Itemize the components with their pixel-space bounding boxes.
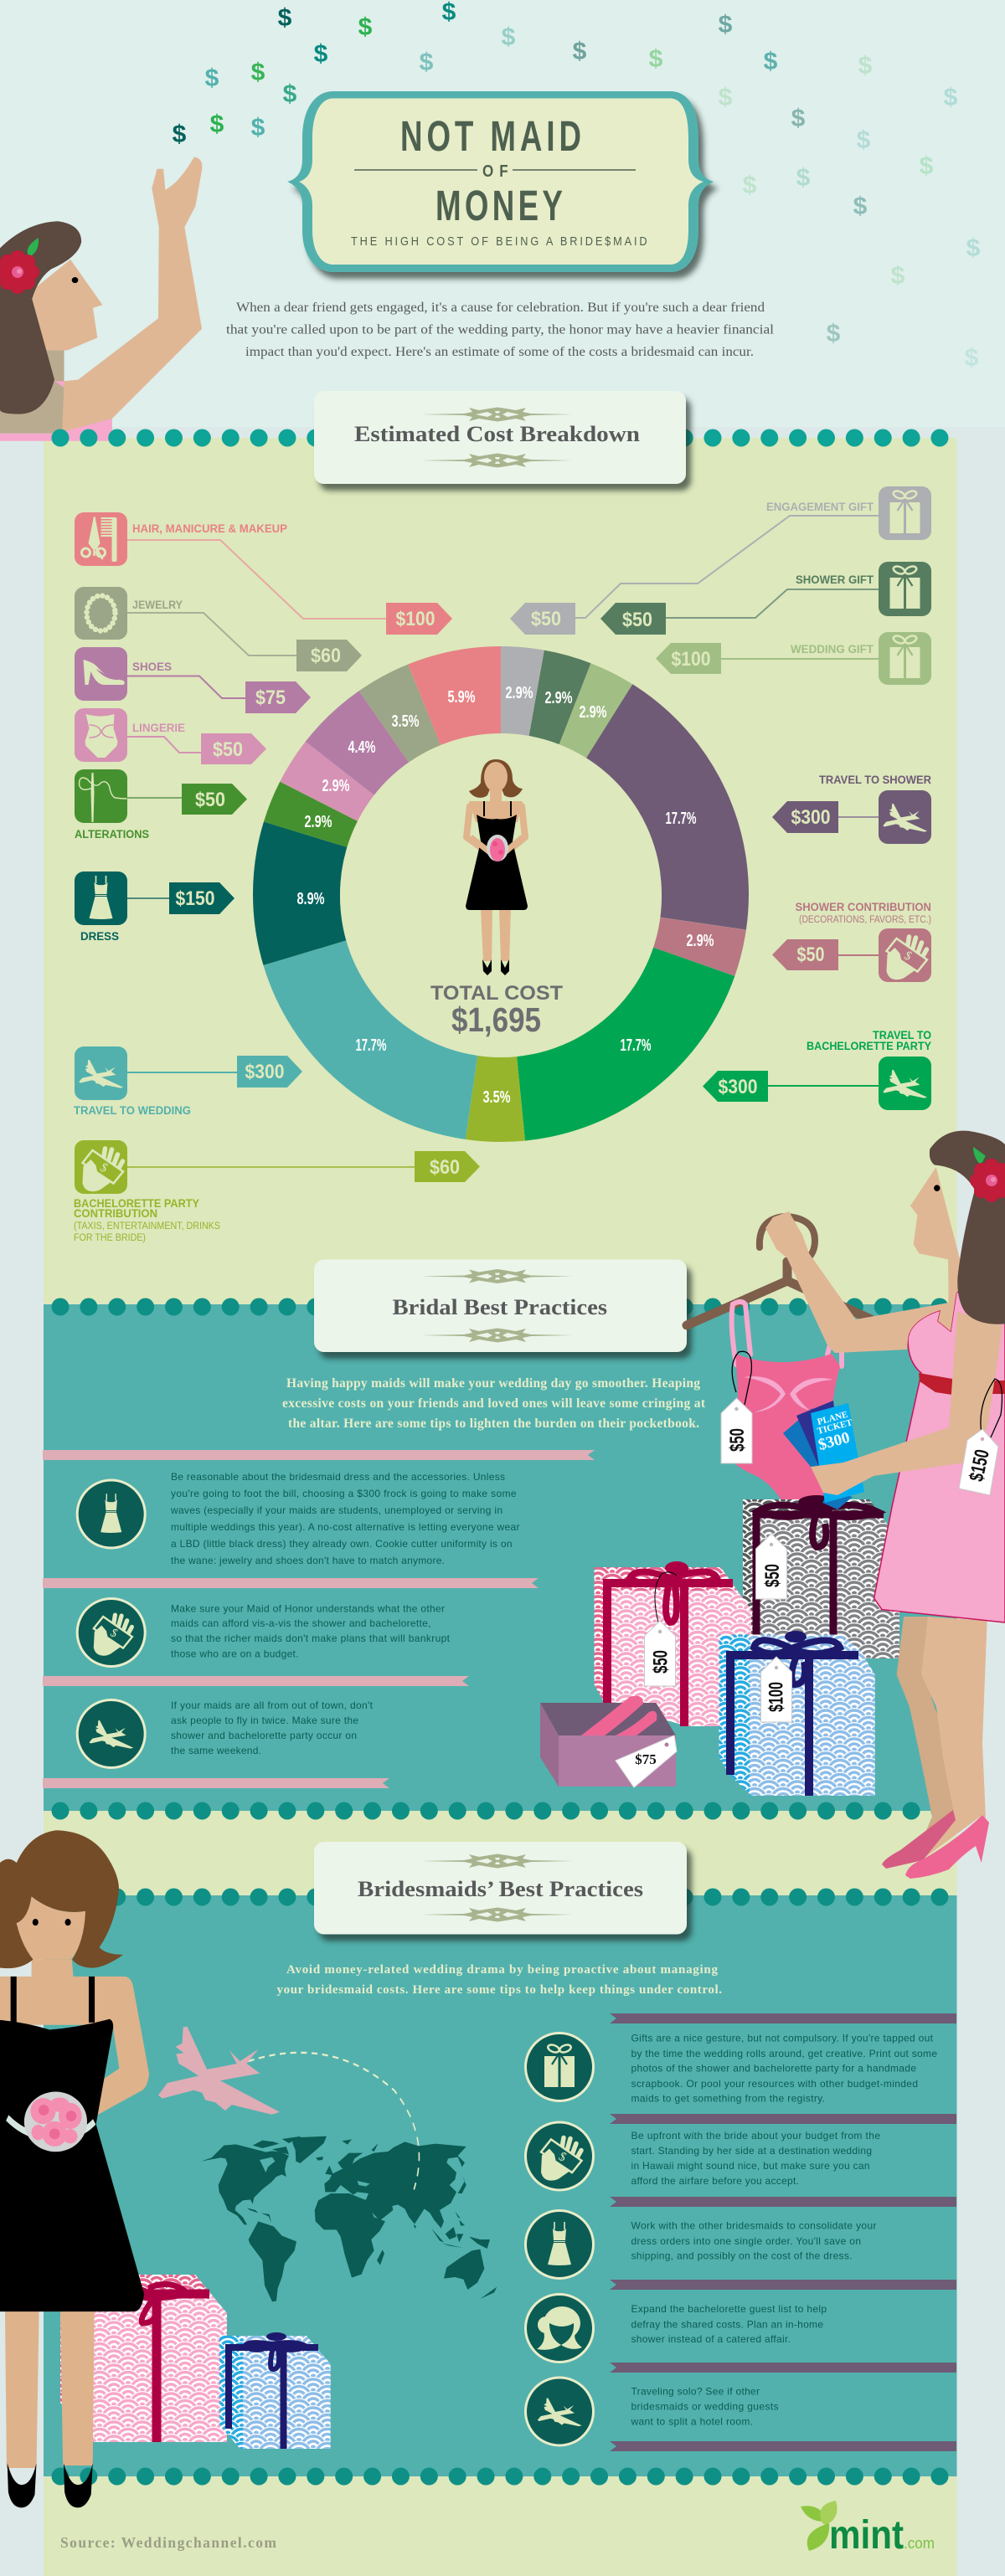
- title text: THE HIGH COST OF BEING A BRIDE$MAID: [351, 234, 647, 248]
- falling dollar signs: $: [858, 52, 873, 80]
- falling dollar signs: $: [358, 13, 373, 41]
- connector lines: [127, 516, 879, 1167]
- item: bachelorette party contribution: FOR THE BRIDE): [74, 1233, 146, 1243]
- percentage labels: 2.9%: [580, 703, 607, 722]
- tip: budget: in Hawaii might sound nice, but make sure you can: [631, 2160, 869, 2172]
- item: travel to wedding: TRAVEL TO WEDDING: [74, 1104, 191, 1117]
- percentage labels: 8.9%: [296, 890, 325, 908]
- source credit: Source: Weddingchannel.com: [60, 2534, 276, 2551]
- falling dollar signs: [173, 0, 981, 372]
- tip: guest list: Expand the bachelorette guest list to help: [631, 2303, 827, 2315]
- falling dollar signs: $: [719, 11, 733, 39]
- percentage labels: 2.9%: [506, 684, 533, 702]
- item: travel to bachelorette party: [703, 1029, 931, 1110]
- percentage labels: 2.9%: [544, 689, 573, 707]
- percentage labels: 2.9%: [305, 813, 332, 831]
- tip: dress: a LBD (little black dress) they already own. Cookie cutter uniformity is on: [171, 1538, 513, 1550]
- price tag: dress: $150: [966, 1447, 994, 1483]
- item: shower gift: SHOWER GIFT: [796, 573, 874, 586]
- bridesmaids intro text: your bridesmaid costs. Here are some tips to help keep things under control.: [276, 1983, 722, 1997]
- bridal intro text: the altar. Here are some tips to lighten the burden on their pocketbook.: [288, 1417, 699, 1431]
- falling dollar signs: $: [251, 114, 265, 141]
- item: travel to wedding: $300: [245, 1061, 285, 1083]
- tip: hotel room: want to split a hotel room.: [630, 2415, 753, 2427]
- price tag: shoes: $75: [635, 1751, 657, 1767]
- price tag: swimsuit: $50: [726, 1428, 749, 1452]
- gift box: blue: [719, 1631, 875, 1796]
- falling dollar signs: $: [853, 193, 868, 220]
- tip: hotel room: Traveling solo? See if other: [631, 2385, 760, 2397]
- tip: dress orders: [526, 2210, 876, 2279]
- item: shower gift: [600, 562, 931, 635]
- percentage labels: 4.4%: [348, 738, 376, 757]
- tip: dress orders: dress orders into one single order. You'll save on: [631, 2235, 861, 2247]
- item: jewelry: JEWELRY: [132, 599, 183, 611]
- price tag: pink gift: [645, 1621, 675, 1686]
- tip: dress: multiple weddings this year). A no-cost alternative is letting everyone wear: [171, 1521, 519, 1533]
- bridal intro text: Having happy maids will make your wedding day go smoother. Heaping: [286, 1376, 700, 1391]
- item: alterations: [75, 769, 247, 841]
- total cost: TOTAL COST: [430, 982, 563, 1005]
- tip: budget: start. Standing by her side at a destination wedding: [631, 2145, 872, 2157]
- mint.com logo: .com: [904, 2535, 935, 2552]
- section heading: Estimated Cost Breakdown: Estimated Cost Breakdown: [354, 422, 641, 446]
- gift box: pink, lower: [60, 2275, 227, 2442]
- price tag: gray gift: [755, 1534, 787, 1599]
- item: alterations: ALTERATIONS: [75, 828, 149, 841]
- price tag: gray gift: $50: [761, 1564, 784, 1587]
- item: travel to shower: [772, 774, 931, 844]
- plane route and pink airplane: [158, 2026, 419, 2189]
- plane tickets: $300: [817, 1429, 852, 1454]
- ribbons: [43, 1450, 595, 1788]
- tip: money: [77, 1599, 451, 1666]
- item: engagement gift: ENGAGEMENT GIFT: [766, 501, 874, 513]
- falling dollar signs: $: [743, 172, 757, 199]
- item: lingerie: [75, 708, 266, 764]
- item: engagement gift: $50: [531, 608, 561, 630]
- tip: dress: Be reasonable about the bridesmaid dress and the accessories. Unless: [171, 1471, 505, 1483]
- item: jewelry: $60: [311, 645, 341, 667]
- total cost: $1,695: [451, 1000, 541, 1039]
- intro paragraph: impact than you'd expect. Here's an estimate of some of the costs a bridesmaid can incur.: [245, 345, 754, 359]
- falling dollar signs: $: [966, 234, 981, 262]
- title text: MONEY: [436, 183, 563, 229]
- bridesmaids intro text: Avoid money-related wedding drama by being proactive about managing: [286, 1963, 719, 1977]
- percentage labels: 3.5%: [482, 1088, 511, 1107]
- percentage labels: 17.7%: [665, 810, 697, 828]
- price tag: shoes: [616, 1735, 677, 1787]
- falling dollar signs: $: [173, 121, 187, 148]
- intro paragraph: [226, 301, 774, 359]
- bridesmaids intro text: [276, 1963, 722, 1997]
- tip: gifts: by the time the wedding rolls around, get creative. Print out some: [631, 2048, 937, 2059]
- tip: budget: [526, 2122, 880, 2190]
- intro paragraph: that you're called upon to be part of the wedding party, the honor may have a heavier financial: [226, 323, 774, 337]
- tip: money: maids can afford vis-a-vis the shower and bachelorette,: [171, 1617, 430, 1629]
- tip: dress: you're going to foot the bill, choosing a $300 frock is going to make some: [171, 1488, 517, 1499]
- item: shoes: $75: [255, 686, 286, 709]
- item: shower contribution: SHOWER CONTRIBUTION: [796, 901, 931, 913]
- falling dollar signs: $: [573, 38, 587, 65]
- item: travel to shower: $300: [791, 806, 831, 829]
- percentage labels: 17.7%: [620, 1036, 652, 1055]
- tip: guest list: [526, 2294, 827, 2363]
- falling dollar signs: $: [210, 111, 224, 138]
- bride figure waving (top left): [0, 157, 202, 441]
- percentage labels: [296, 684, 714, 1107]
- gift box: gray: [743, 1495, 899, 1658]
- falling dollar signs: $: [205, 64, 219, 92]
- item: wedding gift: WEDDING GIFT: [791, 643, 874, 656]
- item: travel to bachelorette party: BACHELORETTE PARTY: [807, 1040, 931, 1052]
- tip: dress: the wane: jewelry and shoes don't have to match anymore.: [171, 1555, 445, 1566]
- tip: guest list: shower instead of a catered affair.: [631, 2333, 791, 2345]
- bridal intro text: excessive costs on your friends and loved ones will leave some cringing at: [282, 1396, 706, 1411]
- title plaque: [287, 91, 714, 272]
- item: travel to shower: TRAVEL TO SHOWER: [819, 774, 931, 786]
- title text: [351, 113, 647, 248]
- price tag: dress: [959, 1379, 1002, 1495]
- item: alterations: $50: [195, 789, 225, 811]
- donut chart: [214, 608, 787, 1180]
- item: lingerie: LINGERIE: [132, 722, 185, 734]
- item: shower contribution: $50: [797, 944, 824, 966]
- item: engagement gift: [510, 486, 931, 635]
- dotted divider top: [60, 429, 941, 447]
- item: jewelry: [75, 587, 362, 671]
- falling dollar signs: $: [314, 40, 328, 68]
- falling dollar signs: $: [827, 320, 841, 347]
- panel: bridesmaids best practices: [0, 1830, 956, 2507]
- tip: dress orders: Work with the other bridesmaids to consolidate your: [631, 2220, 876, 2232]
- falling dollar signs: $: [796, 164, 811, 192]
- plane tickets: [783, 1401, 864, 1509]
- item: bachelorette party contribution: (TAXIS, ENTERTAINMENT, DRINKS: [74, 1221, 220, 1231]
- item: hair, manicure and makeup: HAIR, MANICURE & MAKEUP: [132, 522, 287, 535]
- tip: hotel room: [526, 2378, 779, 2445]
- item: travel to bachelorette party: $300: [719, 1076, 757, 1098]
- bridesmaid with bouquet, left: [0, 1830, 149, 2507]
- tip: plane: ask people to fly in twice. Make sure the: [171, 1715, 358, 1726]
- bridesmaid figure centre of donut: [466, 759, 528, 975]
- tip: plane: If your maids are all from out of town, don't: [171, 1699, 374, 1711]
- falling dollar signs: $: [920, 152, 934, 180]
- falling dollar signs: $: [719, 84, 733, 111]
- title text: NOT MAID: [400, 113, 581, 160]
- total cost: [430, 982, 563, 1039]
- item: bachelorette party contribution: $60: [430, 1156, 460, 1179]
- item: dress: DRESS: [80, 930, 119, 943]
- tip: guest list: defray the shared costs. Plan an in-home: [631, 2318, 823, 2330]
- item: lingerie: $50: [213, 738, 243, 761]
- item: shower contribution: [772, 901, 931, 982]
- tip: dress: [77, 1471, 519, 1566]
- item: shower contribution: (DECORATIONS, FAVORS, ETC.): [799, 915, 931, 925]
- bridesmaid with hanger, right: [765, 1131, 1005, 1879]
- item: shoes: [75, 647, 311, 713]
- falling dollar signs: $: [649, 45, 663, 73]
- tip: money: those who are on a budget.: [171, 1648, 298, 1659]
- head, neck and raised arm: [765, 1167, 1002, 1495]
- heading: bridal best practices: Bridal Best Practices: [392, 1295, 607, 1319]
- tip: hotel room: bridesmaids or wedding guests: [631, 2401, 779, 2413]
- price tag: blue gift: [760, 1657, 792, 1722]
- gift box: pink: [595, 1561, 751, 1726]
- item: dress: [75, 872, 234, 943]
- item: hair, manicure and makeup: [75, 512, 452, 635]
- percentage labels: 5.9%: [447, 688, 476, 707]
- falling dollar signs: $: [278, 4, 292, 32]
- percentage labels: 17.7%: [355, 1036, 387, 1055]
- price tag: swimsuit: [721, 1351, 752, 1463]
- plane tickets: PLANE: [817, 1410, 849, 1427]
- falling dollar signs: $: [764, 48, 778, 75]
- plane tickets: TICKET: [817, 1417, 854, 1437]
- tip: dress orders: shipping, and possibly on the cost of the dress.: [631, 2250, 853, 2262]
- falling dollar signs: $: [283, 80, 297, 108]
- green background panel: [44, 438, 956, 2576]
- falling dollar signs: $: [420, 49, 434, 76]
- falling dollar signs: $: [944, 84, 958, 111]
- section heading: Estimated Cost Breakdown: [314, 391, 686, 484]
- item: shower gift: $50: [622, 609, 652, 631]
- mint.com logo: [801, 2501, 935, 2558]
- shoe box: [540, 1696, 677, 1787]
- falling dollar signs: $: [251, 59, 265, 86]
- tip: gifts: [526, 2033, 937, 2105]
- intro paragraph: When a dear friend gets engaged, it's a cause for celebration. But if you're such a dear friend: [236, 301, 765, 315]
- tip: plane: the same weekend.: [171, 1745, 261, 1756]
- pink dress: [874, 1292, 1005, 1622]
- tip: plane: shower and bachelorette party occur on: [171, 1730, 357, 1741]
- percentage labels: 2.9%: [687, 932, 714, 950]
- tip: gifts: scrapbook. Or pool your resources with other budget-minded: [631, 2078, 918, 2090]
- title text: OF: [482, 162, 508, 180]
- tip: money: Make sure your Maid of Honor understands what the other: [171, 1602, 445, 1614]
- falling dollar signs: $: [857, 126, 871, 154]
- heading: bridesmaids best practices: [314, 1842, 687, 1934]
- bridal intro text: [282, 1376, 706, 1431]
- mint.com logo: mint: [829, 2513, 904, 2558]
- price tag: blue gift: $100: [765, 1682, 787, 1712]
- falling dollar signs: $: [502, 23, 516, 51]
- swimsuit on hanger: [687, 1216, 871, 1507]
- item: dress: $150: [176, 887, 214, 910]
- item: travel to bachelorette party: TRAVEL TO: [873, 1029, 931, 1041]
- item: bachelorette party contribution: BACHELORETTE PARTY: [74, 1197, 199, 1210]
- percentage labels: 3.5%: [392, 712, 420, 731]
- gifts and bridesmaid shopping: [540, 1131, 1005, 1879]
- tip: gifts: photos of the shower and bachelorette party for a handmade: [631, 2063, 916, 2075]
- item: travel to wedding: [74, 1046, 302, 1117]
- falling dollar signs: $: [965, 344, 979, 372]
- world map: [201, 2136, 497, 2301]
- tip: gifts: maids to get something from the registry.: [631, 2093, 825, 2105]
- tip: dress: waves (especially if your maids are students, unemployed or serving in: [170, 1504, 502, 1516]
- panel: bridal best practices: [43, 1259, 956, 1811]
- falling dollar signs: $: [891, 262, 905, 290]
- heading: bridesmaids best practices: Bridesmaids’ Best Practices: [358, 1877, 643, 1901]
- ribbons purple: [610, 2013, 956, 2451]
- item: shoes: SHOES: [132, 661, 172, 673]
- tip: money: so that the richer maids don't make plans that will bankrupt: [171, 1632, 451, 1644]
- item: wedding gift: $100: [672, 648, 710, 671]
- price tag: pink gift: $50: [650, 1650, 672, 1674]
- tip: gifts: Gifts are a nice gesture, but not compulsory. If you're tapped out: [631, 2033, 934, 2044]
- item: bachelorette party contribution: [74, 1140, 480, 1243]
- item: wedding gift: [656, 632, 931, 685]
- falling dollar signs: $: [791, 105, 806, 132]
- item: hair, manicure and makeup: $100: [395, 608, 436, 630]
- tip: budget: Be upfront with the bride about your budget from the: [631, 2130, 880, 2142]
- percentage labels: 2.9%: [322, 777, 350, 795]
- heading: bridal best practices: [314, 1259, 687, 1352]
- gift box: blue, lower: [219, 2332, 331, 2449]
- item: bachelorette party contribution: CONTRIBUTION: [74, 1207, 157, 1220]
- tip: plane: [77, 1699, 374, 1768]
- tip: budget: afford the airfare before you accept.: [631, 2175, 799, 2187]
